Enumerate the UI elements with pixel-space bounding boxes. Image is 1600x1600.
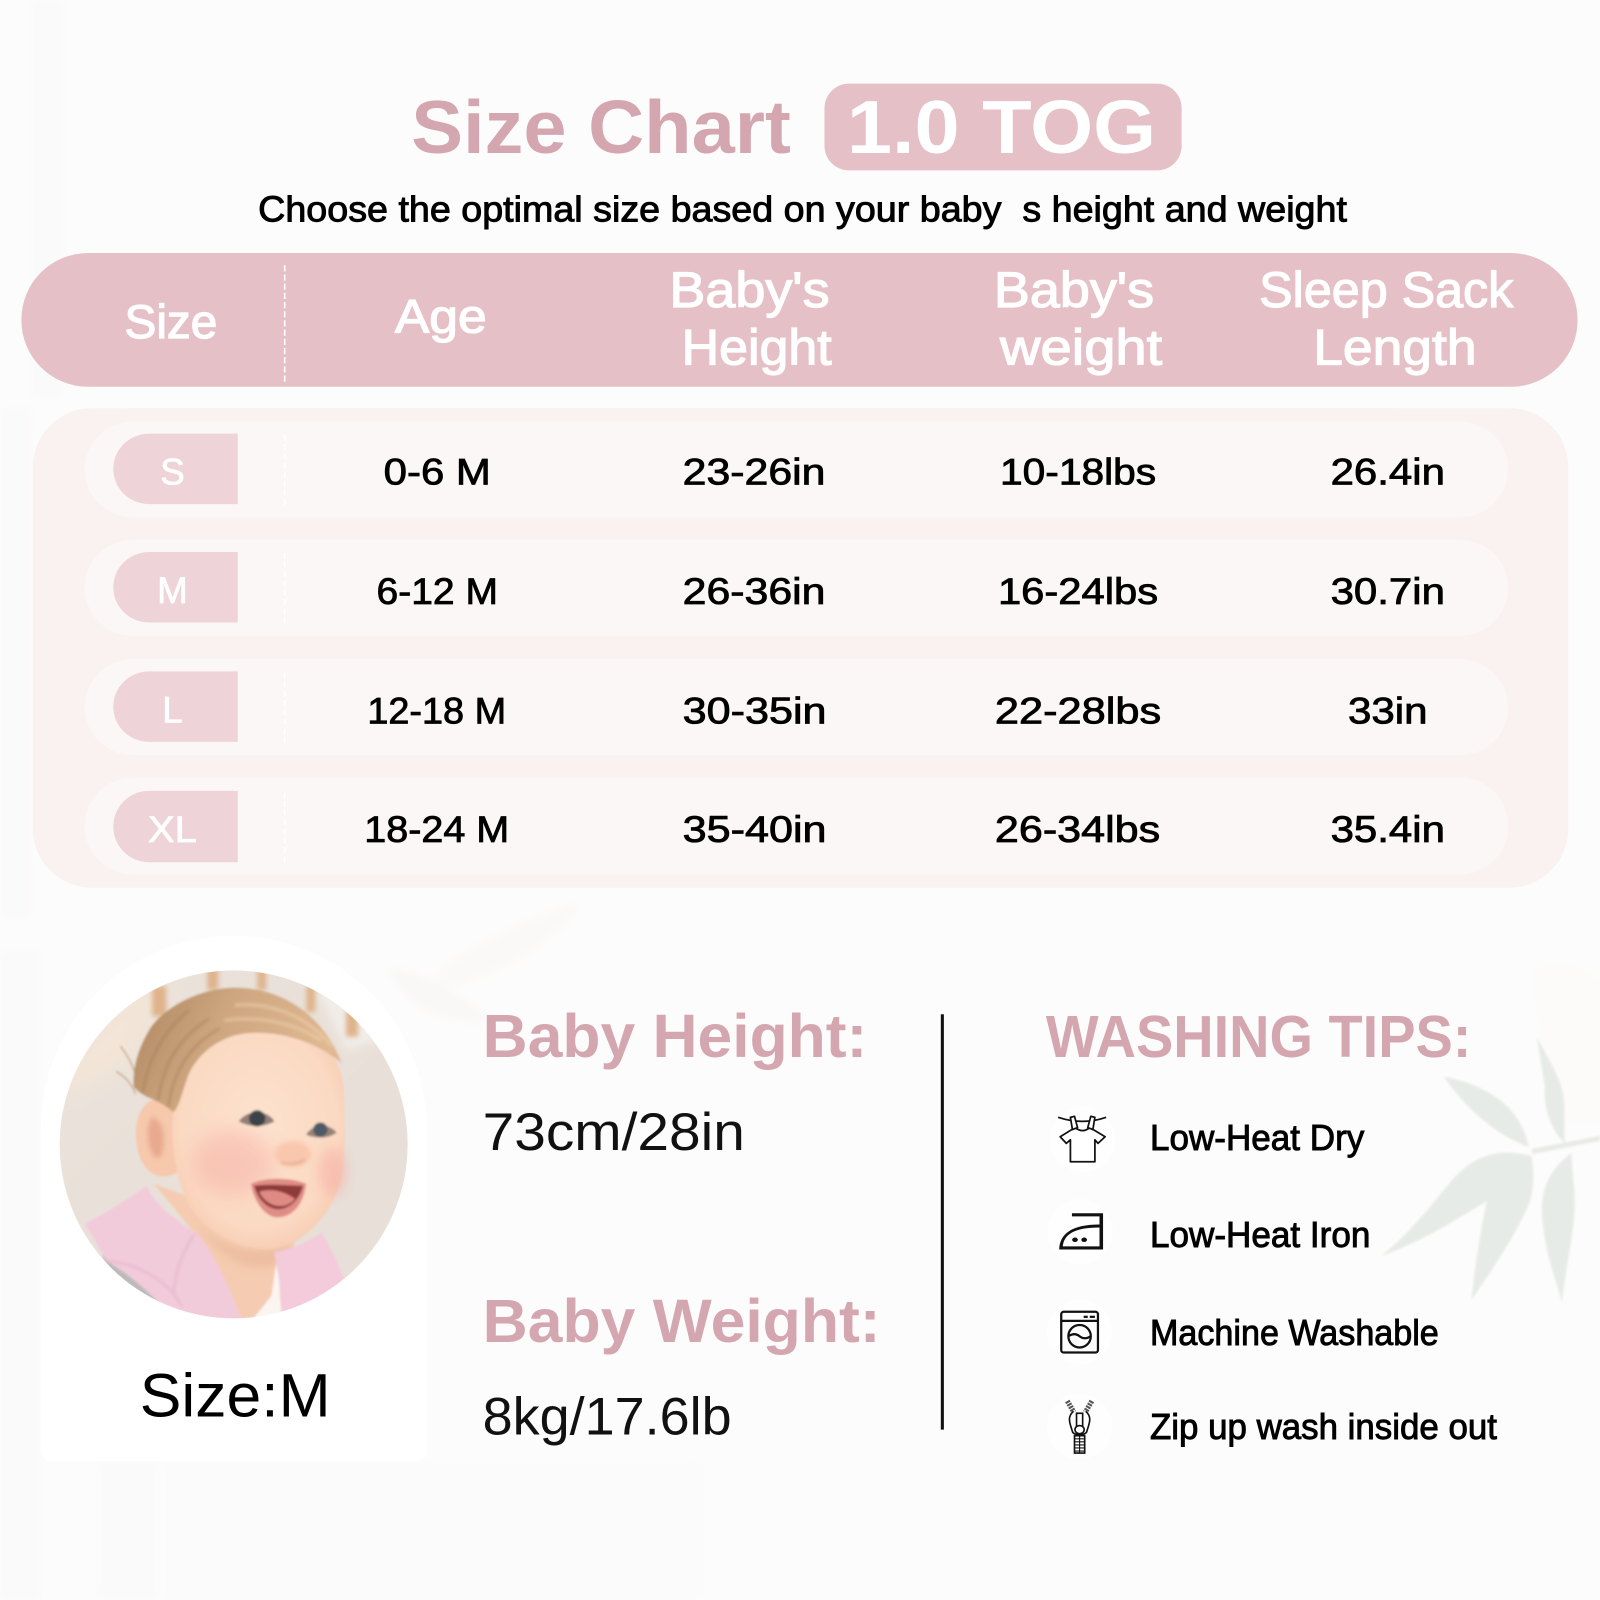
size tag S: S <box>160 452 185 493</box>
header: baby's height: Baby's <box>669 262 830 318</box>
row: L: 22-28lbs <box>995 690 1161 731</box>
table header <box>21 253 1578 387</box>
nose <box>274 1141 311 1167</box>
tip: low-heat iron: Low-Heat Iron <box>1150 1215 1370 1255</box>
row: XL: 18-24 M <box>364 809 509 850</box>
size label: Size:M <box>140 1361 331 1429</box>
ear <box>136 1100 184 1177</box>
value: baby height: 73cm/28in <box>483 1103 745 1162</box>
heading: washing tips: WASHING TIPS: <box>1046 1003 1471 1070</box>
tip: low-heat dry: Low-Heat Dry <box>1150 1118 1364 1158</box>
heading: baby weight: Baby Weight: <box>483 1287 881 1355</box>
size tag L: L <box>162 689 183 730</box>
grey sleeper shadow <box>102 1255 158 1300</box>
row: XL <box>85 778 1508 874</box>
header: sleep sack length: Length <box>1313 319 1477 375</box>
row: L: 30-35in <box>683 690 827 731</box>
icon: washing machine <box>1047 1299 1112 1365</box>
header: sleep sack length <box>1259 262 1514 375</box>
row: S <box>85 421 1508 517</box>
baby photo <box>51 964 418 1327</box>
header: baby's weight <box>994 262 1162 375</box>
icon: zipper <box>1047 1394 1112 1459</box>
row: L: 12-18 M <box>367 690 506 731</box>
size tag XL: XL <box>148 809 197 850</box>
header: baby's weight: Baby's <box>994 262 1154 318</box>
row: S: 10-18lbs <box>1000 452 1156 493</box>
tip: machine washable: Machine Washable <box>1150 1313 1439 1353</box>
table body panel <box>33 408 1568 888</box>
header: baby's height: Height <box>682 319 832 375</box>
row: M <box>85 540 1508 636</box>
row: M: 16-24lbs <box>998 571 1158 612</box>
neck and chest <box>153 1184 296 1322</box>
row: S: 26.4in <box>1331 452 1445 493</box>
hair <box>134 988 342 1112</box>
mouth <box>251 1179 306 1217</box>
header: baby's weight: weight <box>999 319 1162 375</box>
header: baby's height <box>669 262 832 375</box>
eyes <box>239 1110 337 1138</box>
row: M: 6-12 M <box>377 571 498 612</box>
value: baby weight: 8kg/17.6lb <box>483 1388 732 1447</box>
icon: iron <box>1047 1199 1113 1264</box>
row: L <box>85 659 1508 755</box>
title: Size Chart <box>411 86 791 170</box>
subtitle: Choose the optimal size based on your baby s height and weight <box>258 189 1347 229</box>
row: XL: 26-34lbs <box>995 809 1160 850</box>
row: M: 30.7in <box>1331 571 1445 612</box>
panel: baby card <box>60 970 408 1417</box>
size tag L <box>113 671 238 742</box>
cheeks <box>192 1131 273 1196</box>
heading: baby height: Baby Height: <box>483 1002 867 1070</box>
decorative bamboo leaves <box>1381 1037 1600 1303</box>
row: S: 0-6 M <box>384 452 491 493</box>
face <box>172 1029 345 1249</box>
row: XL: 35.4in <box>1331 809 1445 850</box>
sack right shoulder <box>274 1234 344 1312</box>
tip: zip up wash inside out: Zip up wash inside out <box>1150 1407 1497 1447</box>
row: XL: 35-40in <box>683 809 827 850</box>
size tag M <box>113 552 238 622</box>
size tag XL <box>113 791 238 862</box>
header: size: Size <box>124 296 217 348</box>
size tag S <box>113 434 238 504</box>
size tag M: M <box>157 570 188 611</box>
header: age: Age <box>395 291 487 343</box>
sack left shoulder <box>85 1186 243 1322</box>
row: L: 33in <box>1348 690 1428 731</box>
badge: 1.0 TOG: 1.0 TOG <box>847 86 1156 170</box>
row: S: 23-26in <box>683 452 826 493</box>
icon: shirt on line <box>1050 1107 1115 1172</box>
row: M: 26-36in <box>683 571 826 612</box>
header: sleep sack length: Sleep Sack <box>1259 262 1514 318</box>
